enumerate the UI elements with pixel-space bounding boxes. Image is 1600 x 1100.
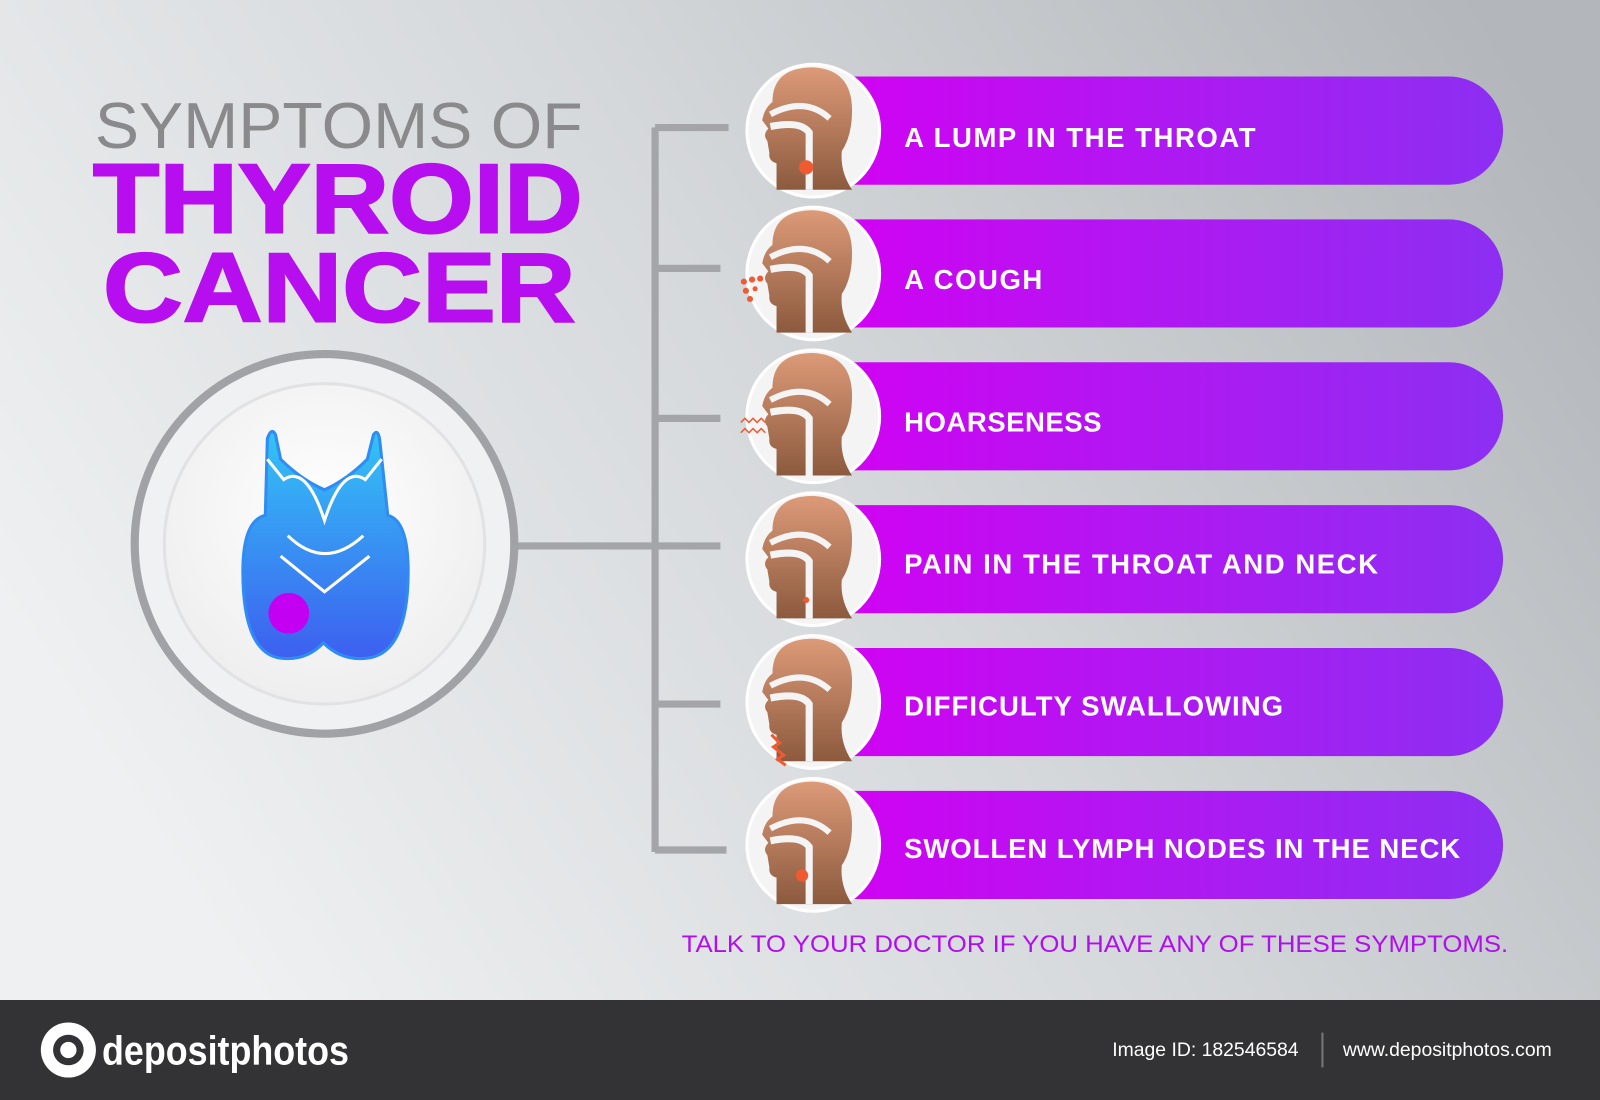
row 3 [741,350,1503,483]
row 6: SWOLLEN LYMPH NODES IN THE NECK [904,833,1461,864]
row 4 [747,493,1503,626]
title: SYMPTOMS OF [95,89,583,162]
footer bar [0,1000,1600,1100]
connector lines [515,128,729,852]
title [93,89,583,342]
row 6 [747,779,1503,911]
row 5 [747,636,1503,768]
icon: logo [41,1022,96,1078]
footer note: TALK TO YOUR DOCTOR IF YOU HAVE ANY OF THESE SYMPTOMS. [682,931,1508,958]
icon: thyroid [243,431,408,659]
row 4: PAIN IN THE THROAT AND NECK [904,548,1380,579]
row 1 [747,64,1503,197]
footer bar: Image ID: 182546584 [1112,1039,1299,1061]
thyroid circle [135,354,514,734]
row 1: A LUMP IN THE THROAT [904,122,1257,153]
rows [741,64,1503,911]
footer bar: www.depositphotos.com [1342,1039,1552,1061]
row 2: A COUGH [904,264,1044,295]
title: THYROID [93,144,583,254]
row 5: DIFFICULTY SWALLOWING [904,690,1284,721]
title: CANCER [103,232,576,342]
footer bar: depositphotos [102,1027,349,1073]
row 3: HOARSENESS [904,407,1102,438]
row 2 [741,207,1503,340]
